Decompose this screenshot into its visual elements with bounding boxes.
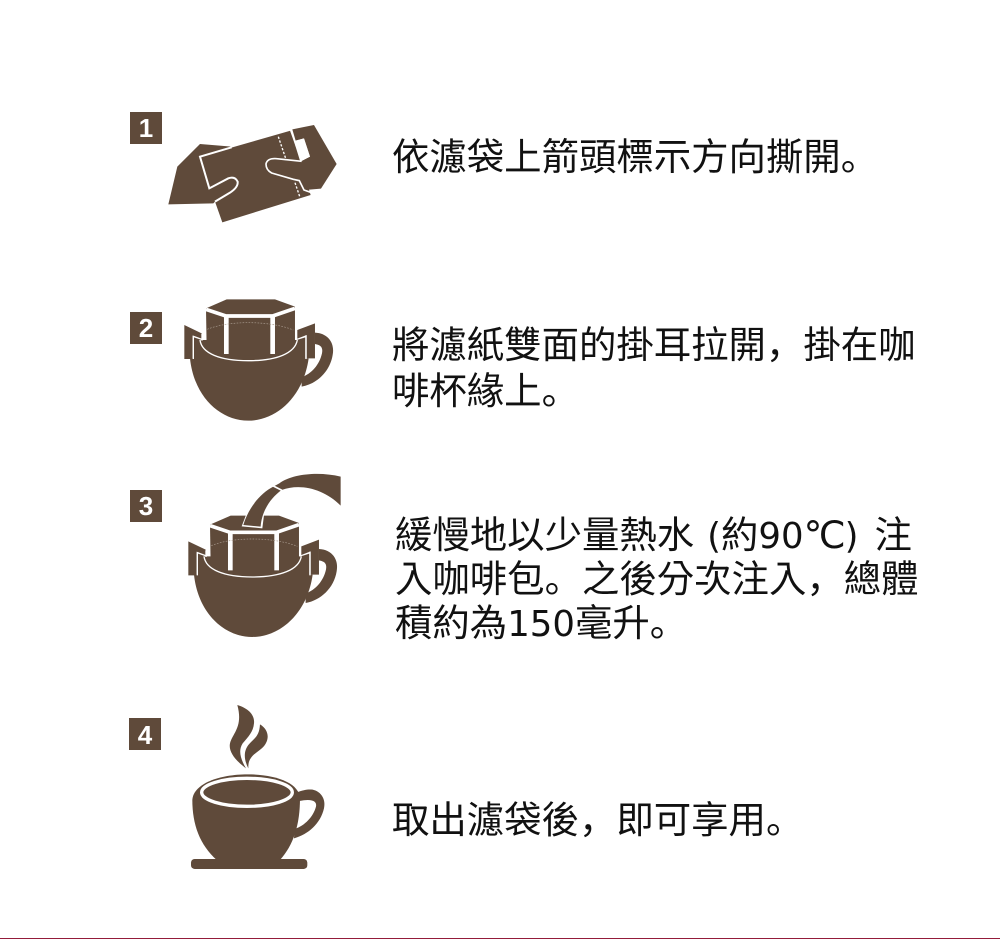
step 3 text: ℃	[804, 514, 846, 556]
step 1 text: 依濾袋上箭頭標示方向撕開。	[392, 127, 878, 181]
step 3 text: 緩慢地以少量熱水 (約90 ) 注	[395, 505, 912, 559]
step 1 badge: 1	[139, 113, 153, 143]
icon: filter hung on a cup	[184, 299, 333, 421]
step 1 badge	[130, 112, 162, 144]
step 2 text	[392, 315, 916, 415]
step 2 text: 啡杯緣上。	[392, 361, 579, 415]
icon: cup of coffee with steam	[191, 705, 324, 869]
icon: pouring water into the filter	[188, 474, 341, 637]
step 3 text: 入咖啡包。之後分次注入，總體	[395, 549, 919, 603]
step 3 badge	[130, 490, 162, 522]
bottom rule	[0, 938, 1000, 939]
icon: hands tearing the filter bag	[168, 125, 337, 222]
step 2 text: 將濾紙雙面的掛耳拉開，掛在咖	[392, 315, 916, 369]
step 4 text: 取出濾袋後，即可享用。	[392, 790, 803, 844]
step 4 badge	[129, 718, 161, 750]
step 2 badge: 2	[139, 313, 153, 343]
step 3 text	[395, 505, 919, 647]
step 4 badge: 4	[138, 720, 153, 750]
step 2 badge	[130, 312, 162, 344]
step 3 text: 積約為150毫升。	[395, 593, 687, 647]
step 3 badge: 3	[139, 491, 153, 521]
